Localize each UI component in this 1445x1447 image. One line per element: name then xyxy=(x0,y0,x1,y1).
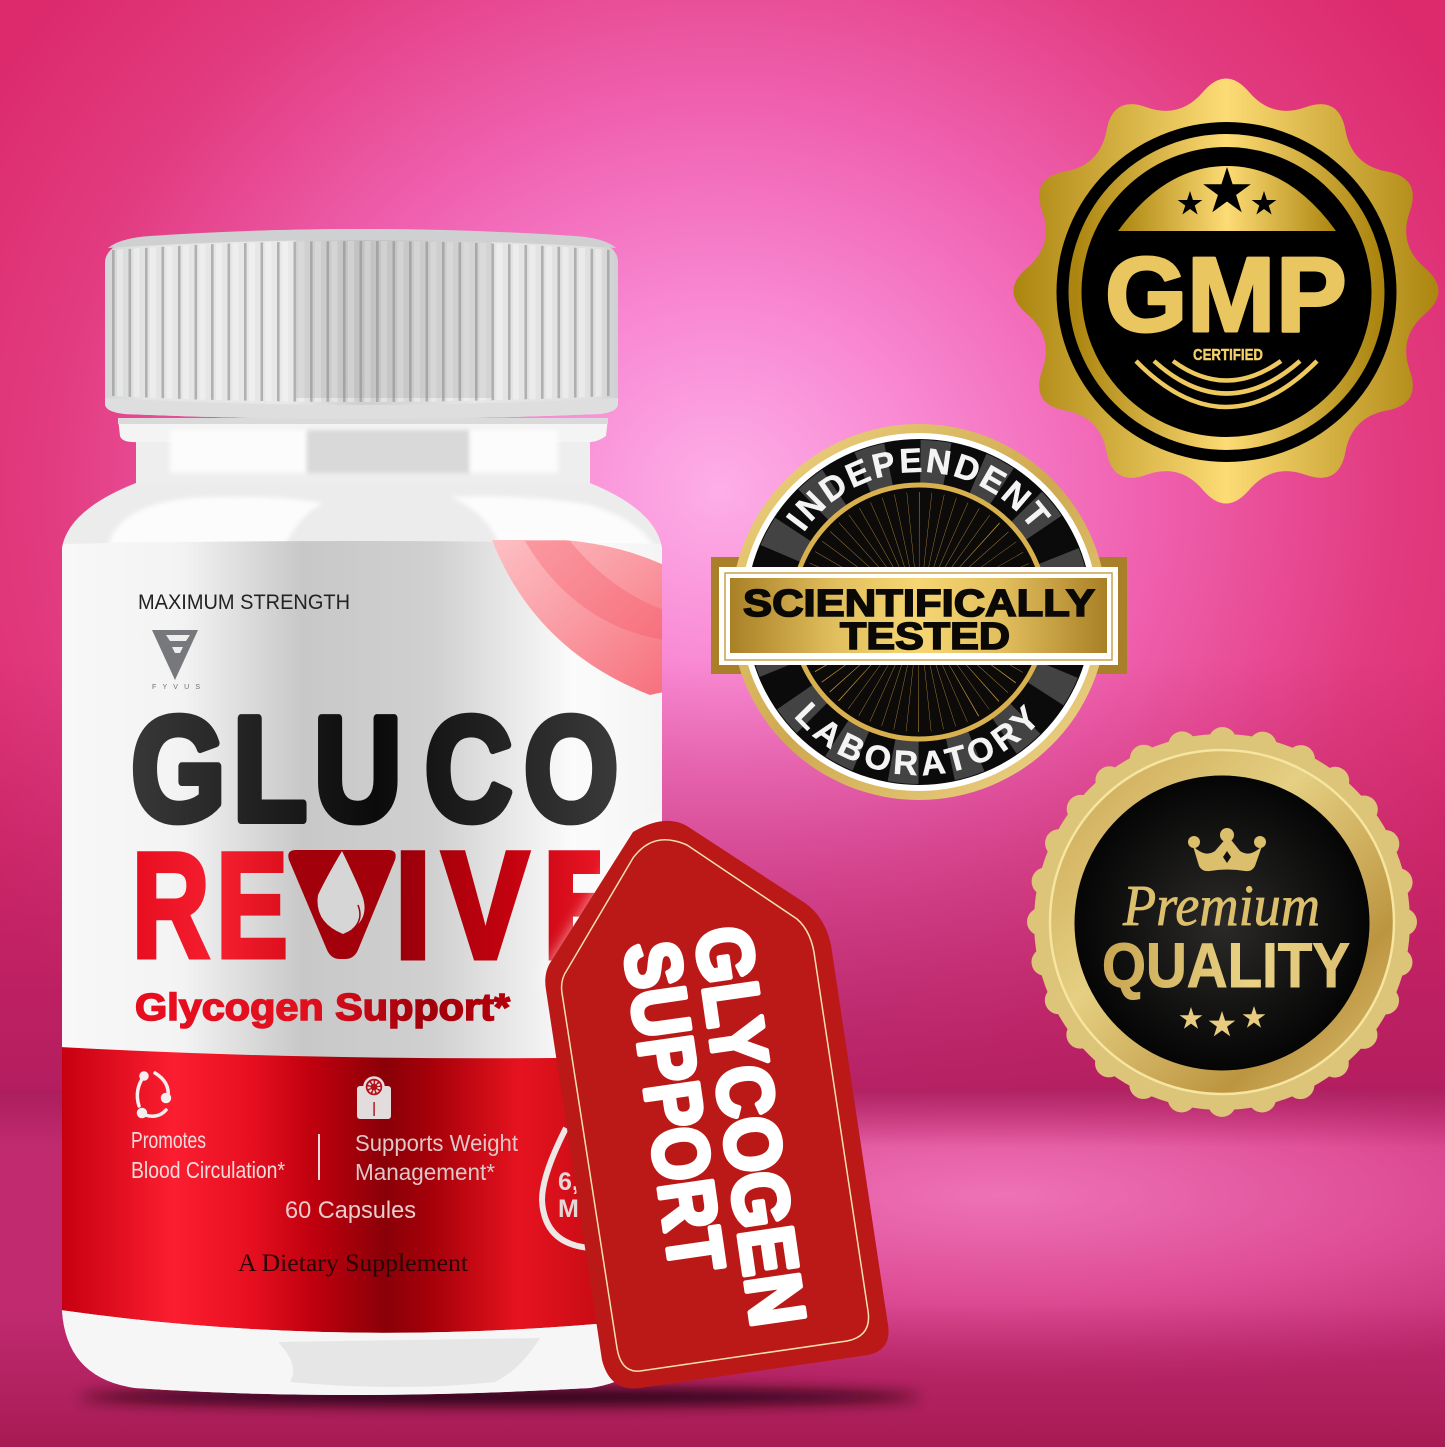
three stars xyxy=(1180,1006,1265,1036)
tag glow on bottle label xyxy=(548,866,600,960)
inner gold ring and rays xyxy=(792,485,1046,739)
bottle base shading xyxy=(278,1338,540,1387)
benefit: blood circulation: Blood Circulation* xyxy=(131,1157,285,1183)
product name: REVIVE: IVE xyxy=(395,822,628,989)
capsule count: 60 Capsules xyxy=(285,1197,416,1224)
bottle shoulder highlights xyxy=(108,496,655,548)
background: pink studio wall xyxy=(0,0,1445,1095)
benefit: weight management: Supports Weight xyxy=(355,1130,519,1156)
outer gold ring xyxy=(731,424,1107,800)
quality text: QUALITY xyxy=(1102,931,1350,1001)
brand logo: Fyvus xyxy=(152,630,200,691)
bottle base xyxy=(62,1310,614,1395)
separator xyxy=(318,1134,320,1180)
arcs xyxy=(1136,361,1317,407)
label: white panel xyxy=(62,541,662,1062)
background: pink studio floor xyxy=(0,1090,1445,1447)
dietary supplement note: A Dietary Supplement xyxy=(238,1250,468,1277)
ribbon text: tested: TESTED xyxy=(840,616,1010,658)
badge: premium quality xyxy=(1034,734,1410,1110)
certified text: CERTIFIED xyxy=(1193,347,1263,364)
label: pink swoosh xyxy=(492,540,664,695)
red tag: glycogen support xyxy=(545,821,889,1388)
scalloped gold rim xyxy=(1034,734,1410,1110)
black centre xyxy=(1074,776,1370,1070)
badge: scientifically tested xyxy=(711,424,1127,800)
dark ring with segments xyxy=(746,439,1092,785)
product name: REVIVE xyxy=(137,850,600,960)
gold ribbon xyxy=(719,567,1118,665)
icon: V with blood drop xyxy=(288,850,396,959)
dosage drop, partially hidden: 6, xyxy=(558,1168,579,1196)
ribbon text: scientifically: SCIENTIFICALLY xyxy=(743,583,1095,625)
tag text: GLYCOGEN: GLYCOGEN xyxy=(678,921,823,1331)
icon: weighing scale xyxy=(357,1078,391,1119)
icon: crown xyxy=(1188,828,1266,871)
product name: GLUCO: GLUCO xyxy=(131,685,618,852)
tagline: Glycogen Support: Glycogen Support* xyxy=(135,987,510,1029)
product name: REVIVE: RE xyxy=(132,822,288,989)
bottle body xyxy=(62,483,662,1395)
brand logo: Fyvus: FYVUS xyxy=(152,684,200,691)
icon: circulation xyxy=(137,1073,170,1116)
seal rings xyxy=(1056,122,1396,462)
supplement bottle xyxy=(60,229,664,1400)
ring text: independent: INDEPENDENT xyxy=(786,448,1052,532)
ring text: laboratory: LABORATORY xyxy=(794,702,1036,776)
benefit: blood circulation: Promotes xyxy=(131,1127,206,1153)
bottle cap xyxy=(105,229,618,419)
white ring xyxy=(740,433,1098,791)
ribbon back xyxy=(711,557,1127,674)
label: maximum strength: MAXIMUM STRENGTH xyxy=(138,591,350,614)
benefit: weight management: Management* xyxy=(355,1159,495,1185)
label: red band xyxy=(60,1047,640,1333)
badge: GMP certified xyxy=(1014,79,1438,503)
seal scalloped edge xyxy=(1014,79,1438,503)
dosage drop, partially hidden: M xyxy=(558,1195,579,1223)
bottle neck xyxy=(118,418,608,490)
dosage drop, partially hidden xyxy=(542,1128,590,1248)
tag text: SUPPORT: SUPPORT xyxy=(607,936,742,1277)
dome with stars xyxy=(1118,166,1336,231)
bottle shadow on floor xyxy=(80,1388,920,1406)
premium script text: Premium xyxy=(1122,873,1320,938)
GMP text: GMP xyxy=(1105,236,1347,354)
